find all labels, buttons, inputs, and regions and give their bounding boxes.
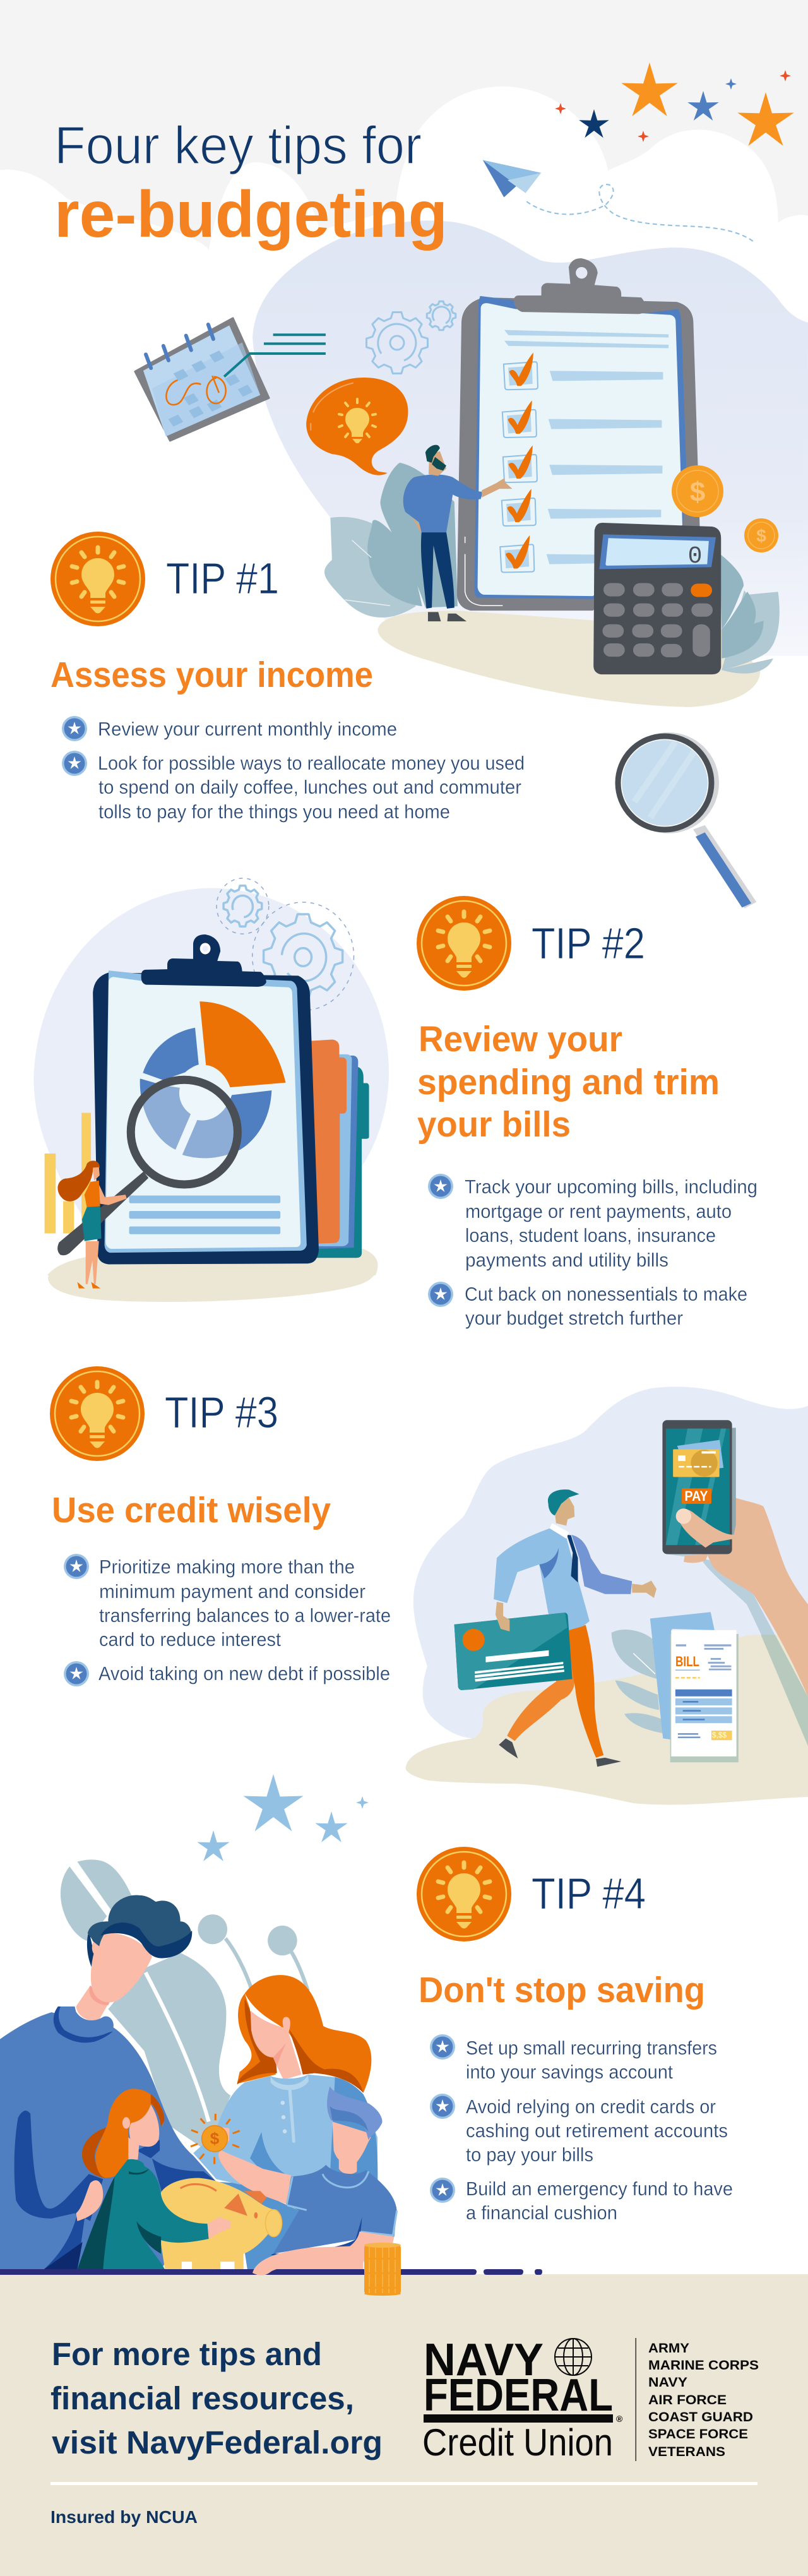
father: [0, 1895, 217, 2270]
gears: [366, 301, 456, 374]
ground repeat under clipboard: [47, 1249, 377, 1275]
tip 4 bullets: to pay your bills: [466, 2144, 593, 2166]
tip 3 bullets: [64, 1554, 391, 1686]
calculator digit: 0: [688, 543, 702, 570]
tip 2 bullets: your budget stretch further: [465, 1307, 683, 1329]
boy's arm reaching over band: [252, 2246, 366, 2275]
coin dollar sign: $: [210, 2129, 220, 2148]
footer panel: [0, 2274, 808, 2576]
footer call to action: [50, 2336, 383, 2460]
tip 2 heading: Review your: [419, 1019, 622, 1059]
title: Four key tips for: [54, 116, 422, 175]
military branches list: VETERANS: [648, 2445, 725, 2459]
background blob: [413, 1386, 808, 1738]
tip 1 bullets: to spend on daily coffee, lunches out and commuter: [98, 776, 521, 798]
header cloud background: [0, 0, 808, 250]
tip 2 bullets: loans, student loans, insurance: [465, 1224, 716, 1246]
yellow bars: [45, 1112, 91, 1234]
tip 3 badge: TIP #3: [165, 1388, 278, 1437]
stars: [555, 63, 794, 146]
military branches list: NAVY: [648, 2375, 687, 2390]
tip 2 badge: [417, 896, 645, 991]
plants: [324, 463, 780, 674]
icon: magnifying glass: [616, 732, 756, 909]
tip 1 badge: [50, 532, 279, 626]
tip 4 bullets: Build an emergency fund to have: [466, 2178, 733, 2200]
tip 1 bullets: [62, 716, 525, 823]
tip 2 bullets: [428, 1174, 758, 1329]
woman: [57, 1160, 127, 1284]
tip 1 bullets: tolls to pay for the things you need at home: [98, 801, 450, 823]
Navy Federal logo: ®: [616, 2414, 623, 2424]
bulb in speech bubble: [339, 399, 376, 443]
tip 4 bullets: Set up small recurring transfers: [466, 2037, 717, 2059]
tip 2 badge: TIP #2: [532, 919, 645, 968]
tip 3 bullets: Prioritize making more than the: [99, 1556, 355, 1578]
title: re-budgeting: [54, 178, 448, 251]
tip 2 bullets: Cut back on nonessentials to make: [465, 1283, 747, 1305]
tip 3 bullets: card to reduce interest: [99, 1628, 281, 1650]
man pointing at checklist: [403, 445, 513, 621]
military branches list: [648, 2341, 759, 2459]
tip 2 bullets: payments and utility bills: [465, 1249, 668, 1271]
decorative stars: [197, 1774, 369, 1861]
pie chart: [140, 1001, 286, 1158]
paper plane: [483, 160, 755, 242]
coins: [672, 465, 778, 552]
footer call to action: financial resources,: [50, 2380, 354, 2416]
tip 3 heading: Use credit wisely: [52, 1490, 331, 1530]
footer call to action: For more tips and: [52, 2336, 322, 2372]
coins: $: [756, 526, 766, 546]
man walking: [494, 1489, 656, 1767]
leaves: [612, 1630, 663, 1733]
bill amount: $,$$: [712, 1731, 727, 1739]
tip 1 badge: TIP #1: [166, 554, 279, 603]
PAY label: PAY: [684, 1488, 708, 1504]
piggy bank: [158, 2178, 282, 2270]
military branches list: SPACE FORCE: [648, 2427, 748, 2442]
tip 3 bullets: minimum payment and consider: [99, 1580, 365, 1602]
mother: [193, 1975, 377, 2270]
military branches list: ARMY: [648, 2341, 689, 2356]
speech bubble: [306, 378, 408, 475]
hand shadow: [667, 1554, 808, 1746]
lavender blob: [252, 220, 808, 656]
folders: [311, 1040, 369, 1258]
coin stack: [364, 2243, 401, 2296]
tip 4 bullets: Avoid relying on credit cards or: [466, 2096, 716, 2118]
bottom band: [0, 2269, 542, 2275]
divider line: [635, 2338, 636, 2461]
military branches list: AIR FORCE: [648, 2393, 727, 2407]
tip 3 bullets: Avoid taking on new debt if possible: [98, 1662, 390, 1685]
tip 2 illustration: [33, 878, 389, 1302]
coin with rays: [191, 2114, 240, 2164]
icon: globe: [555, 2339, 591, 2375]
tip 3 illustration: [406, 1386, 808, 1804]
Navy Federal logo: [422, 2335, 623, 2464]
Navy Federal logo: FEDERAL: [424, 2370, 613, 2421]
background leaves: [61, 1859, 308, 2150]
white divider: [50, 2482, 758, 2485]
header illustration: [135, 63, 808, 707]
tip 1 bullets: Look for possible ways to reallocate money you used: [98, 752, 525, 774]
tip 2 bullets: Track your upcoming bills, including: [465, 1176, 758, 1198]
ground: [377, 611, 760, 707]
tip 4 badge: TIP #4: [532, 1869, 646, 1918]
tip 4 illustration: [0, 1774, 397, 2273]
calculator: [593, 523, 721, 674]
gears: [217, 878, 354, 1010]
tip 4 bullets: cashing out retirement accounts: [466, 2120, 728, 2142]
credit card: [454, 1602, 573, 1690]
insured by NCUA: Insured by NCUA: [50, 2507, 198, 2527]
tip 2 heading: [417, 1019, 720, 1145]
tip 4 bullets: into your savings account: [466, 2061, 673, 2083]
military branches list: COAST GUARD: [648, 2410, 753, 2424]
girl: [76, 2089, 230, 2270]
tip 3 bullets: transferring balances to a lower-rate: [99, 1604, 391, 1626]
Navy Federal logo: Credit Union: [422, 2421, 613, 2464]
clipboard: [93, 934, 319, 1265]
Navy Federal logo: NAVY: [424, 2335, 544, 2385]
tip 2 heading: spending and trim: [417, 1062, 720, 1102]
phone and hand: [662, 1420, 808, 1697]
calendar: [135, 318, 326, 441]
background blob: [33, 888, 389, 1243]
ground: [48, 1256, 376, 1302]
bills: [650, 1612, 739, 1762]
tip 1 heading: Assess your income: [50, 655, 373, 695]
tip 4 bullets: a financial cushion: [466, 2202, 617, 2224]
footer call to action: visit NavyFederal.org: [52, 2424, 383, 2460]
coins: $: [690, 477, 705, 508]
ground: [406, 1635, 808, 1804]
tip 1 bullets: Review your current monthly income: [98, 718, 397, 740]
tip 4 bullets: [430, 2034, 733, 2224]
tip 4 badge: [417, 1847, 646, 1941]
military branches list: MARINE CORPS: [648, 2358, 759, 2373]
magnifier: [57, 1080, 237, 1255]
title: [54, 116, 448, 251]
tip 4 heading: Don't stop saving: [419, 1970, 705, 2010]
clipboard with checklist: [457, 258, 700, 611]
BILL label: BILL: [675, 1654, 699, 1669]
tip 2 heading: your bills: [417, 1104, 571, 1145]
tip 2 bullets: mortgage or rent payments, auto: [465, 1200, 732, 1222]
boy: [254, 2086, 397, 2273]
woman's shoes: [77, 1282, 100, 1289]
tip 3 badge: [50, 1366, 278, 1461]
